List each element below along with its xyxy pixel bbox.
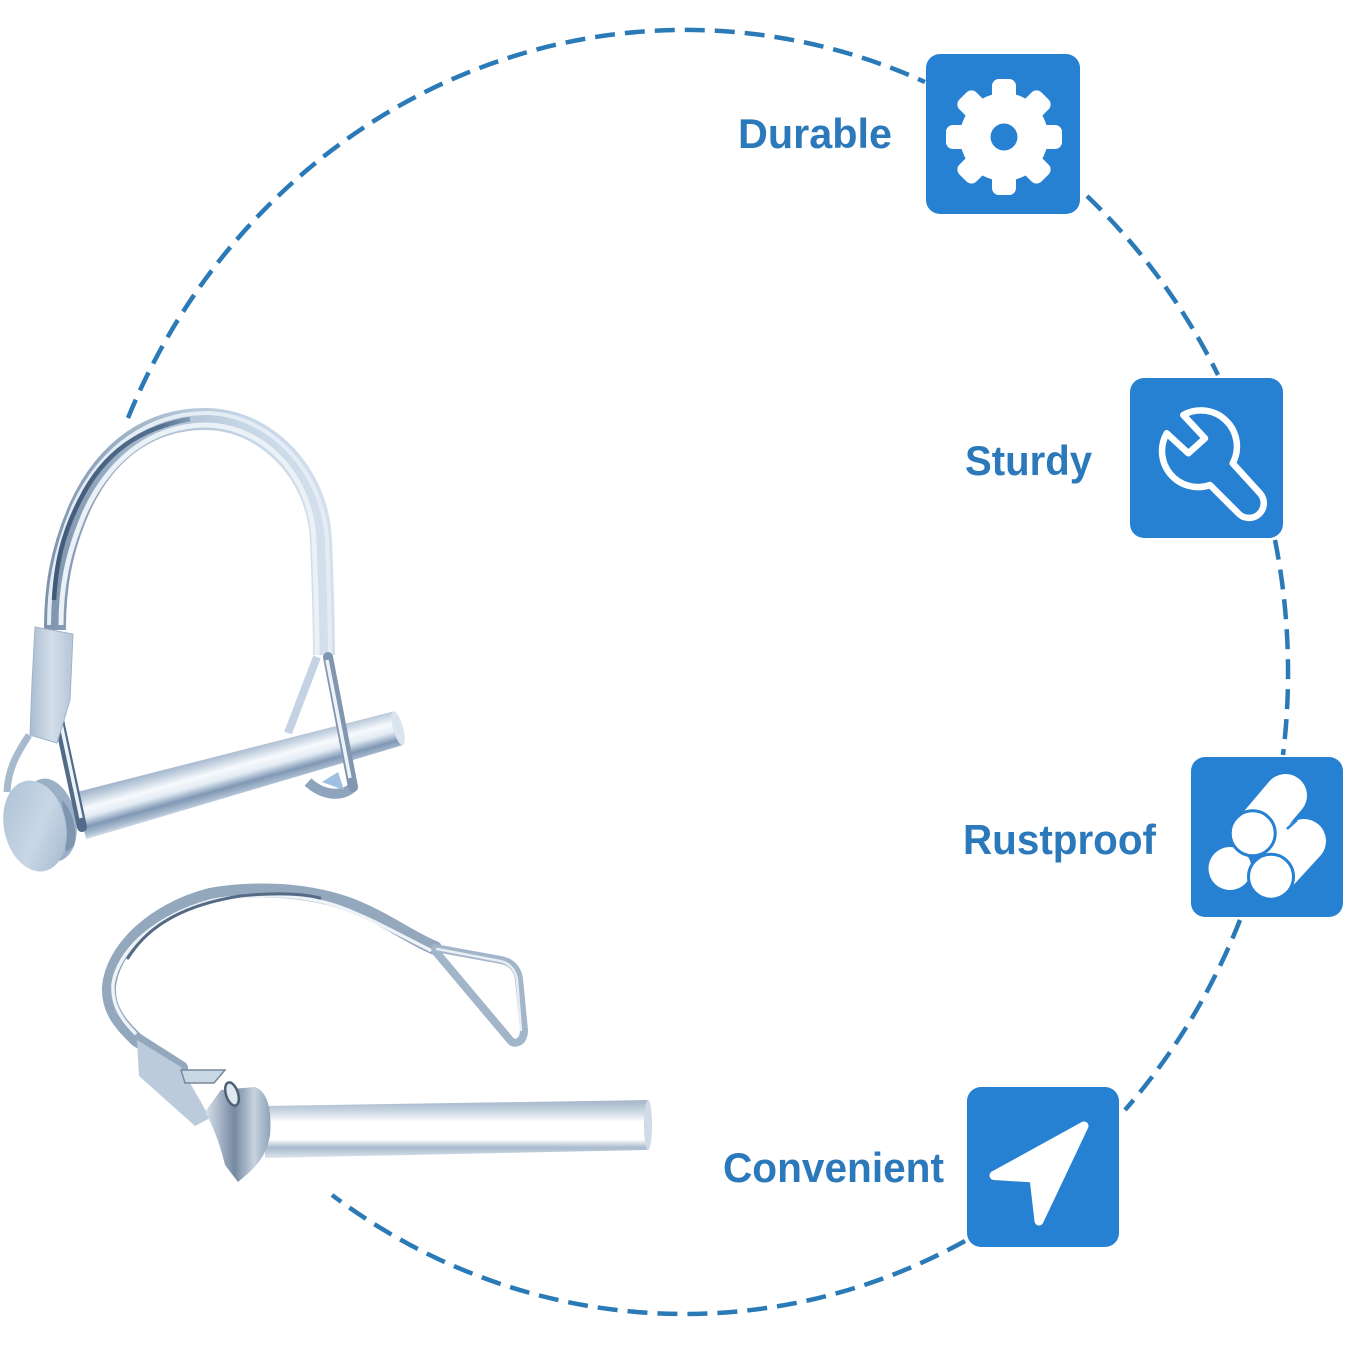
icon tile: [967, 1087, 1119, 1247]
link tab: [181, 1070, 225, 1083]
head with rivet: [205, 1081, 270, 1182]
crimp sleeve: [30, 627, 73, 743]
feature: Sturdy: [965, 378, 1283, 538]
icon tile: [926, 54, 1080, 214]
shaft: [265, 1100, 652, 1158]
feature: Durable: [738, 54, 1080, 214]
pull ring wire: [109, 890, 524, 1068]
icon: wrench: [1162, 410, 1264, 518]
label: Durable: [738, 110, 892, 157]
icon: navigation arrow: [994, 1126, 1084, 1221]
left wire loop: [7, 735, 29, 792]
photo: open locking pin: [109, 890, 652, 1182]
right strut: [327, 657, 353, 787]
label: Sturdy: [965, 437, 1093, 484]
icon: gear: [946, 79, 1062, 195]
pin shaft: [74, 703, 409, 839]
pin head: [0, 774, 84, 877]
lower wire loop behind pin: [308, 772, 353, 794]
icon: stacked pipes: [1208, 796, 1304, 899]
label: Rustproof: [963, 816, 1157, 863]
icon tile: [1191, 757, 1343, 917]
feature: Convenient: [723, 1087, 1119, 1247]
left strut: [59, 720, 82, 827]
feature: Rustproof: [963, 757, 1343, 917]
shackle wire: [49, 413, 330, 733]
label: Convenient: [723, 1144, 944, 1191]
photo: assembled locking pin: [0, 413, 409, 877]
icon tile: [1130, 378, 1283, 538]
crimp sleeve: [137, 1040, 210, 1126]
